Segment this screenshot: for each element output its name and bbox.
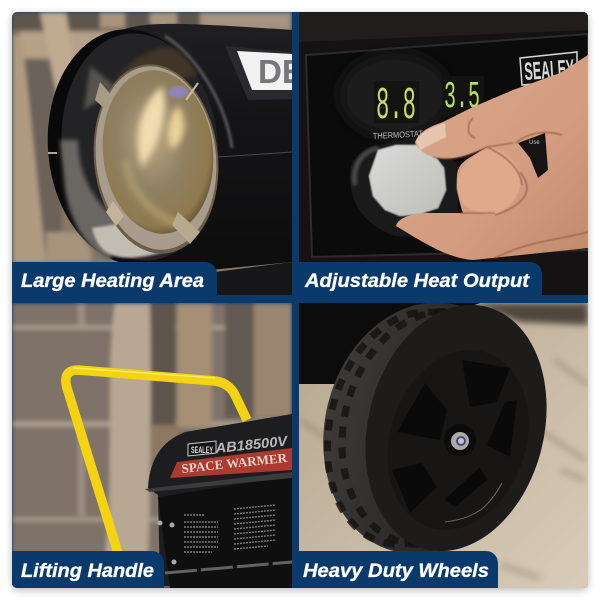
caption tab: [12, 262, 217, 295]
yellow lifting handle: [66, 368, 247, 553]
panel: adjustable heat output: [299, 12, 588, 295]
thermostat label: THERMOSTAT: [373, 128, 423, 141]
concrete floor: [299, 303, 588, 588]
display: 3.5: [442, 76, 479, 115]
SEALEY logo: [520, 52, 577, 86]
label: DE on body: DE: [258, 53, 304, 90]
caption tab: [299, 262, 542, 295]
hand: [396, 55, 588, 260]
control panel: [306, 34, 588, 257]
screws: [158, 520, 162, 526]
burner ring: [48, 29, 218, 262]
heater underside: [299, 303, 480, 384]
caption tab: [12, 551, 164, 588]
rim highlight: [445, 483, 502, 522]
panel: large heating area: [12, 12, 304, 295]
dial base: [350, 135, 458, 238]
hub nut: [444, 424, 476, 456]
heater: top cover: [148, 414, 292, 586]
display: 3.5: 3.5: [444, 76, 480, 119]
fingernail: [416, 123, 446, 150]
red space warmer band: SPACE WARMER: [181, 450, 288, 476]
display: 8.8: 8.8: [376, 81, 416, 132]
finger creases: [433, 118, 588, 258]
model name: AB18500V: [214, 432, 290, 456]
caption tab: [299, 551, 498, 588]
warning text block: [518, 133, 548, 178]
lower trim highlight: [165, 562, 292, 573]
forefinger and back of hand: [396, 55, 588, 260]
dome clips: [95, 82, 112, 110]
caption tab: Heavy Duty Wheels: [303, 560, 489, 582]
tyre face: [340, 285, 572, 571]
model name: [188, 436, 288, 456]
rain rim: [145, 472, 292, 492]
wheel: [297, 281, 572, 575]
dome: [94, 46, 218, 254]
background: brick wall and planks: [12, 303, 292, 588]
panel: heavy duty wheels: [297, 281, 588, 588]
heater: lower body: [158, 476, 292, 588]
control housing: [299, 12, 588, 295]
body seam: [218, 152, 292, 157]
warning text block: Use: [529, 140, 540, 146]
caption tab: Lifting Handle: [21, 560, 154, 582]
bottom shadow strip: [215, 262, 292, 295]
heater body: [110, 24, 292, 272]
hub recess: [365, 331, 551, 549]
body highlight: [165, 36, 232, 148]
panel: lifting handle: [12, 303, 292, 588]
specification label: [184, 505, 276, 552]
caption tab: Large Heating Area: [21, 270, 204, 292]
caption tab: Adjustable Heat Output: [304, 270, 531, 292]
middle fingers shading: [457, 147, 521, 215]
display: 8.8: [374, 81, 419, 123]
background: wooden pallets: [12, 12, 292, 295]
model name: SEALEY: [191, 445, 213, 455]
label: DE on body: [225, 46, 292, 100]
spoke openings: [392, 360, 517, 513]
grey knob: [369, 145, 446, 216]
tread: [297, 281, 553, 575]
